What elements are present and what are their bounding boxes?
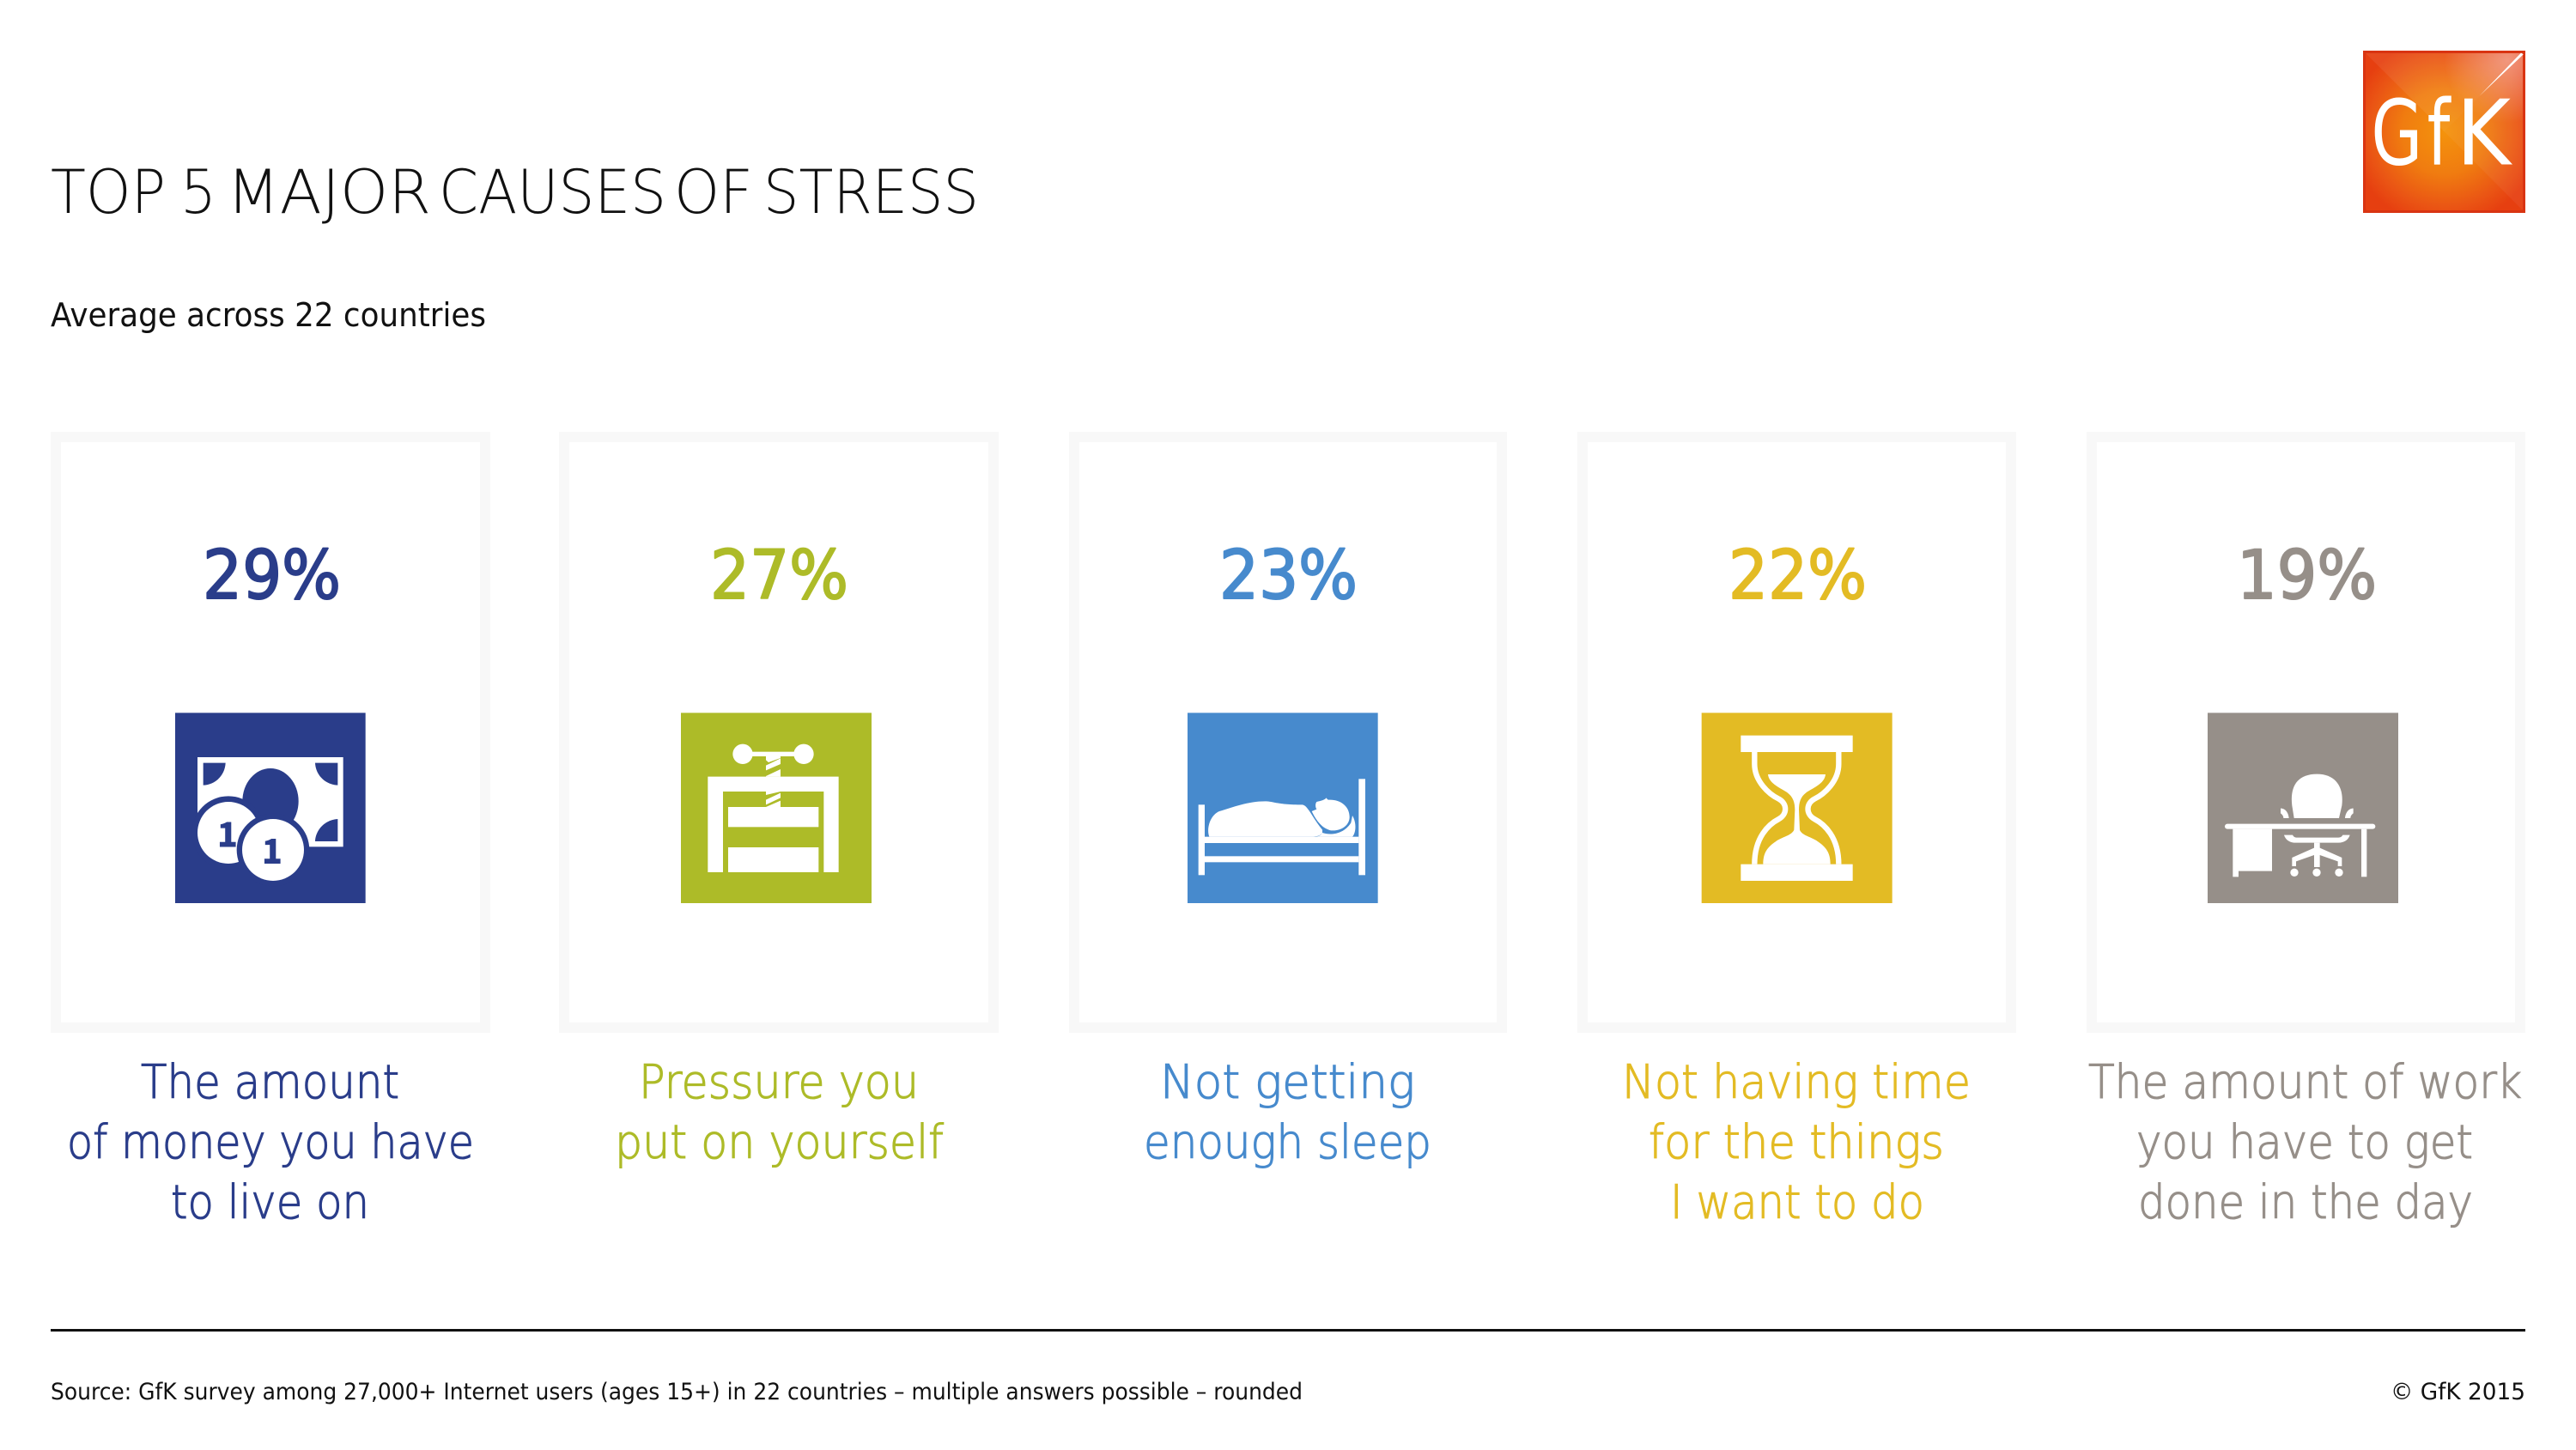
label: money: to live on xyxy=(171,1175,369,1229)
title xyxy=(51,157,979,228)
copyright: © GfK 2015 xyxy=(2391,1379,2525,1405)
label: work: done in the day xyxy=(2138,1175,2473,1229)
label: work: The amount of work xyxy=(2088,1055,2522,1109)
panel: work xyxy=(2088,437,2522,1229)
percentage: 29%: 29% xyxy=(203,537,341,615)
icon: banknote and coins: 1 xyxy=(217,809,238,858)
label: work xyxy=(2088,1055,2522,1229)
label: money xyxy=(67,1055,474,1229)
card frame xyxy=(1074,437,1502,1028)
card frame xyxy=(1583,437,2011,1028)
logo: GfK: f xyxy=(2427,81,2451,185)
source note: Source: GfK survey among 27,000+ Internet users (ages 15+) in 22 countries – multiple answers possible – rounded xyxy=(51,1379,1303,1405)
label: sleep: Not getting xyxy=(1160,1055,1415,1109)
icon: banknote and coins xyxy=(175,713,366,903)
label: sleep xyxy=(1144,1055,1431,1169)
icon: press xyxy=(681,713,872,903)
title: 5 xyxy=(180,157,216,228)
label: money: of money you have xyxy=(67,1115,474,1169)
card frame xyxy=(564,437,993,1028)
label: time: for the things xyxy=(1649,1115,1944,1169)
icon: person in bed xyxy=(1188,713,1378,903)
icon: banknote and coins: 1 xyxy=(262,825,283,874)
panel: pressure xyxy=(564,437,993,1169)
label: time: I want to do xyxy=(1670,1175,1924,1229)
logo: GfK: G xyxy=(2371,81,2422,185)
icon: hourglass xyxy=(1702,713,1893,903)
percentage: 27%: 27% xyxy=(710,537,848,615)
panel: sleep xyxy=(1074,437,1502,1169)
label: pressure: put on yourself xyxy=(615,1115,944,1169)
logo: GfK: K xyxy=(2457,81,2513,185)
card frame xyxy=(56,437,485,1028)
label: time xyxy=(1622,1055,1971,1229)
panel: time xyxy=(1583,437,2011,1229)
title: TOP xyxy=(51,157,166,228)
logo: GfK xyxy=(2363,51,2525,213)
icon: desk and chair xyxy=(2208,713,2398,903)
label: money: The amount xyxy=(141,1055,399,1109)
title: STRESS xyxy=(763,157,979,228)
label: pressure xyxy=(615,1055,944,1169)
label: work: you have to get xyxy=(2136,1115,2473,1169)
panel: money xyxy=(56,437,485,1229)
percentage: 23%: 23% xyxy=(1219,537,1358,615)
subtitle: Average across 22 countries xyxy=(51,296,486,334)
label: time: Not having time xyxy=(1622,1055,1971,1109)
card frame xyxy=(2092,437,2520,1028)
title: MAJOR xyxy=(227,157,431,228)
title: CAUSES xyxy=(439,157,666,228)
label: pressure: Pressure you xyxy=(639,1055,919,1109)
percentage: 19%: 19% xyxy=(2237,537,2377,615)
title: OF xyxy=(674,157,753,228)
label: sleep: enough sleep xyxy=(1144,1115,1431,1169)
percentage: 22%: 22% xyxy=(1728,537,1867,615)
